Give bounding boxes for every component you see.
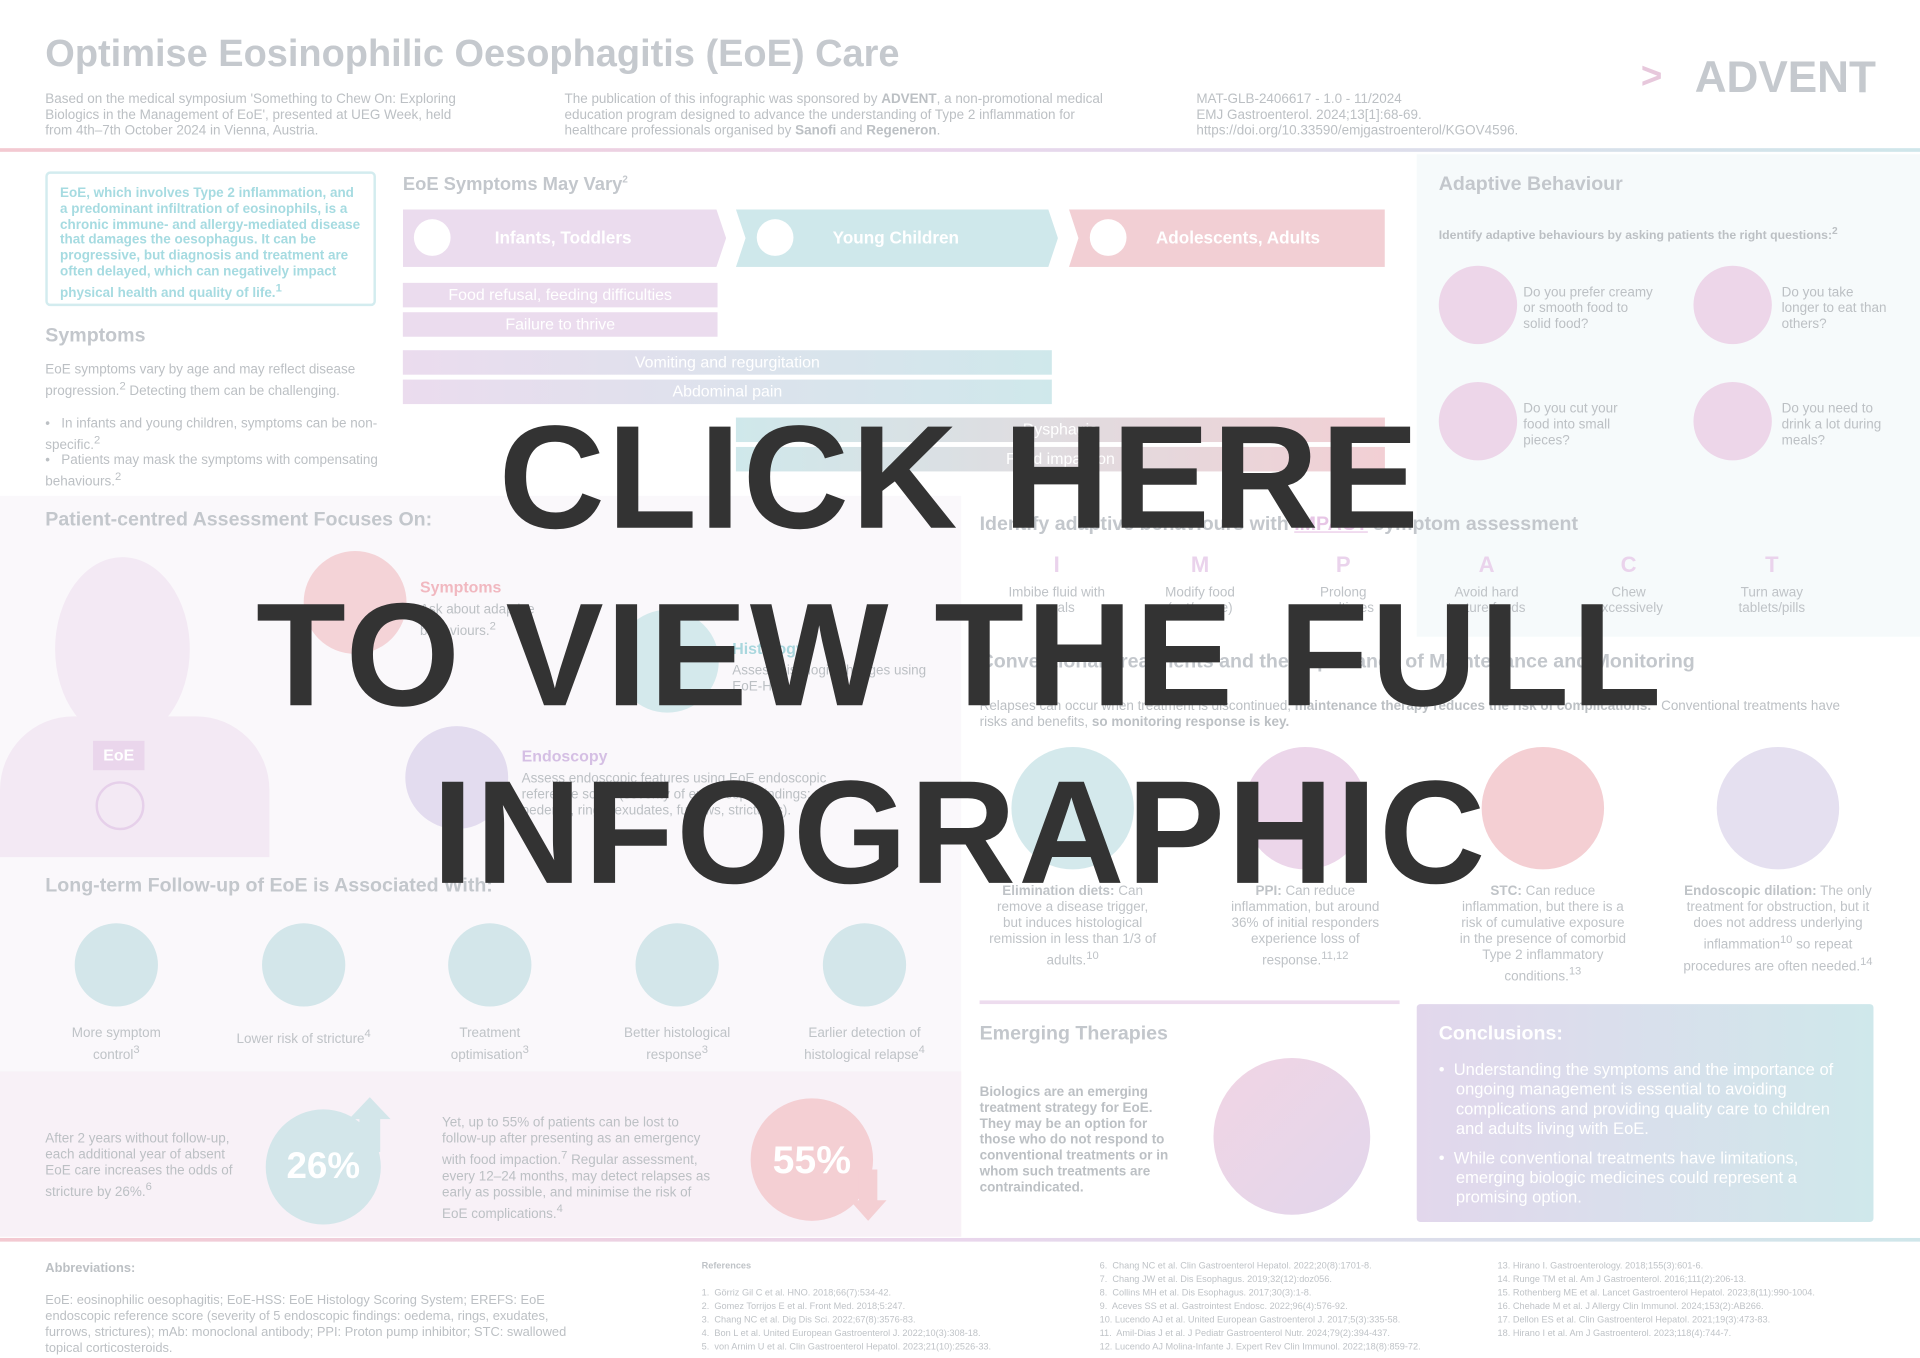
references: 18. Hirano I et al. Am J Gastroenterol. 2023;118(4):744-7. (1498, 1327, 1731, 1338)
abbreviations: Abbreviations: (45, 1261, 135, 1276)
follow-up heading: Long-term Follow-up of EoE is Associated With: (45, 876, 493, 896)
IMPACT letters: Modify food (cut/puree) (1165, 585, 1235, 616)
human silhouette (0, 557, 270, 857)
symptoms heading: Symptoms (45, 326, 145, 347)
symptoms text: • In infants and young children, symptoms can be non-specific.2 (45, 416, 377, 452)
follow-up icons: Better histological response3 (624, 1026, 730, 1062)
text: 55% (773, 1138, 851, 1182)
panel: adaptive bg (1417, 154, 1920, 637)
chevron: young children (736, 209, 1058, 267)
endoscopy (405, 726, 508, 829)
logo: > (1641, 56, 1662, 97)
panel: assessment bg (0, 496, 961, 1237)
stat 26%: After 2 years without follow-up, each additional year of absent EoE care increases the odds of stricture by 26%.6 (45, 1131, 233, 1200)
symptoms text: EoE symptoms vary by age and may reflect disease progression.2 Detecting them can be challenging. (45, 362, 355, 399)
abbreviations: EoE: eosinophilic oesophagitis; EoE-HSS: EoE Histology Scoring System; EREFS: EoE endoscopic reference score (severity of 5 endoscopic findings: oedema, rings, exudates, furrows, strictures); mAb: monoclonal antibody; PPI: Proton pump inhibitor; STC: swallowed topical corticosteroids. (45, 1293, 566, 1356)
conclusions: • Understanding the symptoms and the importance of ongoing management is essential to avoiding complications and providing quality care to children and adults living with EoE. (1439, 1060, 1833, 1138)
conventional heading: Conventional Treatments and the Importance of Maintenance and Monitoring (980, 651, 1695, 672)
overlay: click here text: CLICK HERE (499, 396, 1421, 560)
chevron: infants: Infants, Toddlers (495, 228, 632, 247)
histology (616, 610, 719, 713)
references: 15. Rothenberg ME et al. Lancet Gastroenterol Hepatol. 2023;8(11):990-1004. (1498, 1287, 1815, 1298)
references: 16. Chehade M et al. J Allergy Clin Immunol. 2024;153(2):AB266. (1498, 1300, 1764, 1311)
conclusions: • While conventional treatments have limitations, emerging biologic medicines could represent a promising option. (1439, 1149, 1798, 1206)
abbreviations (45, 1261, 566, 1356)
references: 2. Gomez Torrijos E et al. Front Med. 2018;5:247. (702, 1300, 905, 1311)
text: Biologics are an emerging treatment strategy for EoE. They may be an option for those who do not respond to conventional treatments or in whom such treatments are contraindicated. (980, 1085, 1168, 1195)
text: 5. von Arnim U et al. Clin Gastroenterol Hepatol. 2023;21(10):2526-33. (702, 1341, 991, 1352)
text: Histology (732, 639, 805, 658)
IMPACT letters: C (1621, 552, 1637, 577)
header text: sponsor: The publication of this infographic was sponsored by ADVENT, a non-promotional medical education program designed to advance the understanding of Type 2 inflammation for healthcare professionals organised by Sanofi and Regeneron. (564, 92, 1103, 138)
chevron: young children: Young Children (833, 228, 959, 247)
follow-up icons (72, 923, 925, 1062)
IMPACT letters: M (1191, 552, 1209, 577)
adaptive questions: Do you take longer to eat than others? (1782, 285, 1886, 332)
header text: citation: MAT-GLB-2406617 - 1.0 - 11/2024 (1196, 92, 1402, 107)
stat 55%: Yet, up to 55% of patients can be lost to follow-up after presenting as an emergency with food impaction.7 Regular assessment, every 12–24 months, may detect relapses as early as possible, and minimise the risk of EoE complications.4 (442, 1116, 710, 1221)
text: 12. Lucendo AJ Molina-Infante J. Expert Rev Clin Immunol. 2022;18(8):859-72. (1100, 1341, 1421, 1352)
references: 1. Görriz Gil C et al. HNO. 2018;66(7):534-42. (702, 1287, 891, 1298)
text: Endoscopic dilation: The only treatment for obstruction, but it does not address underlying inflammation10 so repeat procedures are often needed.14 (1683, 884, 1873, 974)
header text: citation: EMJ Gastroenterol. 2024;13[1]:68-69. (1196, 108, 1422, 122)
text: Endoscopy (522, 747, 607, 765)
IMPACT letters: A (1479, 552, 1494, 577)
text: Relapses can occur when treatment is discontinued, maintenance therapy reduces the risk of complications.5 Conventional treatments have risks and benefits, so monitoring response is key. (980, 694, 1840, 729)
human silhouette: EoE (103, 746, 134, 764)
adaptive questions (1438, 266, 1886, 460)
references: 7. Chang JW et al. Dis Esophagus. 2019;32(12):doz056. (1100, 1273, 1332, 1284)
chevron: infants (403, 209, 726, 267)
logo: ADVENT (1695, 51, 1876, 102)
references: 6. Chang NC et al. Clin Gastroenterol Hepatol. 2022;20(8):1701-8. (1100, 1260, 1372, 1271)
text: Failure to thrive (505, 315, 615, 333)
references: 3. Chang NC et al. Dig Dis Sci. 2022;67(8):3576-83. (702, 1314, 916, 1325)
text: Elimination diets: Can remove a disease trigger, but induces histological remission in less than 1/3 of adults.10 (989, 884, 1156, 968)
chevron: adults: Adolescents, Adults (1156, 228, 1320, 247)
references (702, 1260, 1815, 1352)
references: References (702, 1260, 751, 1271)
symptoms assessment (304, 551, 407, 654)
chevron: adults (1069, 209, 1385, 267)
references: 17. Dellon ES et al. Clin Gastroenterol Hepatol. 2021;19(3):473-83. (1498, 1314, 1770, 1325)
follow-up icons: More symptom control3 (72, 1026, 161, 1062)
overlay: click here text: TO VIEW THE FULL (256, 573, 1664, 737)
text: PPI: Can reduce inflammation, but around 36% of initial responders experience loss of response.11,12 (1231, 884, 1379, 968)
follow-up icons: Lower risk of stricture4 (237, 1027, 371, 1047)
IMPACT letters: Prolong mealtimes (1313, 585, 1374, 616)
references: 4. Bon L et al. United European Gastroenterol J. 2022;10(3):308-18. (702, 1327, 981, 1338)
text: Dysphagia (1023, 420, 1098, 438)
text: Food impaction (1006, 449, 1115, 468)
symptom bars (403, 283, 718, 307)
text: STC: Can reduce inflammation, but there is a risk of cumulative exposure in the presence of comorbid Type 2 inflammatory conditions.13 (1460, 884, 1626, 984)
IMPACT heading: Identify adaptive behaviours with IMPACT symptom assessment (980, 514, 1578, 535)
assessment heading: Patient-centred Assessment Focuses On: (45, 509, 432, 530)
text: Ask about adaptive behaviours.2 (420, 602, 535, 639)
references: 9. Aceves SS et al. Gastrointest Endosc. 2022;96(4):576-92. (1100, 1300, 1348, 1311)
header text: citation (1196, 92, 1518, 138)
references: 13. Hirano I. Gastroenterology. 2018;155(3):601-6. (1498, 1260, 1703, 1271)
text: Abdominal pain (672, 382, 782, 400)
treatment circles (1011, 747, 1134, 869)
adaptive heading: Adaptive Behaviour (1439, 174, 1623, 195)
text: Assess endoscopic features using EoE endoscopic reference score (severity of endoscopic findings: oedema, rings, exudates, furrows, strictures). (522, 771, 826, 818)
adaptive questions: Do you cut your food into small pieces? (1523, 402, 1618, 448)
IMPACT letters: Chew excessively (1594, 585, 1663, 616)
symptoms vary heading: EoE Symptoms May Vary2 (403, 174, 628, 195)
IMPACT letters (1008, 552, 1805, 616)
references: 11. Amil-Dias J et al. J Pediatr Gastroenterol Nutr. 2024;79(2):394-437. (1100, 1327, 1390, 1338)
IMPACT letters: Turn away tablets/pills (1739, 585, 1805, 616)
title: Optimise Eosinophilic Oesophagitis (EoE) Care (45, 32, 900, 75)
symptoms text: • Patients may mask the symptoms with compensating behaviours.2 (45, 453, 378, 490)
header text: symposium: Based on the medical symposium 'Something to Chew On: Exploring Biologics in the Management of EoE', presented at UEG Week, held from 4th–7th October 2024 in Vienna, Austria. (45, 92, 456, 138)
follow-up icons: Treatment optimisation3 (451, 1026, 529, 1062)
conclusions (1417, 1004, 1873, 1222)
references: 8. Collins MH et al. Dis Esophagus. 2017;30(3):1-8. (1100, 1287, 1311, 1298)
IMPACT letters: T (1765, 552, 1779, 577)
symptom bars: Food refusal, feeding difficulties (448, 285, 672, 304)
adaptive questions: Do you need to drink a lot during meals? (1782, 402, 1881, 448)
adaptive questions: Do you prefer creamy or smooth food to solid food? (1523, 285, 1653, 332)
text: Assess histologic changes using EoE-HSS. (732, 664, 926, 694)
references: 14. Runge TM et al. Am J Gastroenterol. 2016;111(2):206-13. (1498, 1273, 1746, 1284)
text: Symptoms (420, 578, 501, 596)
symptoms text (45, 362, 378, 490)
text: Identify adaptive behaviours by asking patients the right questions:2 (1439, 224, 1838, 243)
header text: citation: https://doi.org/10.33590/emjgastroenterol/KGOV4596. (1196, 124, 1518, 138)
text: Vomiting and regurgitation (635, 353, 820, 371)
overlay: click here text: INFOGRAPHIC (432, 751, 1488, 915)
IMPACT letters: I (1054, 552, 1060, 577)
conclusions: Conclusions: (1439, 1024, 1563, 1044)
IMPACT letters: Avoid hard texture foods (1448, 585, 1525, 616)
overlay: click here text (256, 396, 1664, 915)
IMPACT letters: Imbibe fluid with meals (1008, 585, 1105, 616)
references: 10. Lucendo AJ et al. United European Gastroenterol J. 2017;5(3):335-58. (1100, 1314, 1400, 1325)
text: 26% (286, 1146, 360, 1187)
emerging therapies: Emerging Therapies (980, 1024, 1168, 1044)
follow-up icons: Earlier detection of histological relapse4 (804, 1026, 925, 1062)
intro box: EoE, which involves Type 2 inflammation, and a predominant infiltration of eosinophils, is a chronic immune- and allergy-mediated disease that damages the oesophagus. It can be progressive, but diagnosis and treatment are often delayed, which can negatively impact physical health and quality of life.1 (60, 186, 360, 301)
IMPACT letters: P (1336, 552, 1351, 577)
